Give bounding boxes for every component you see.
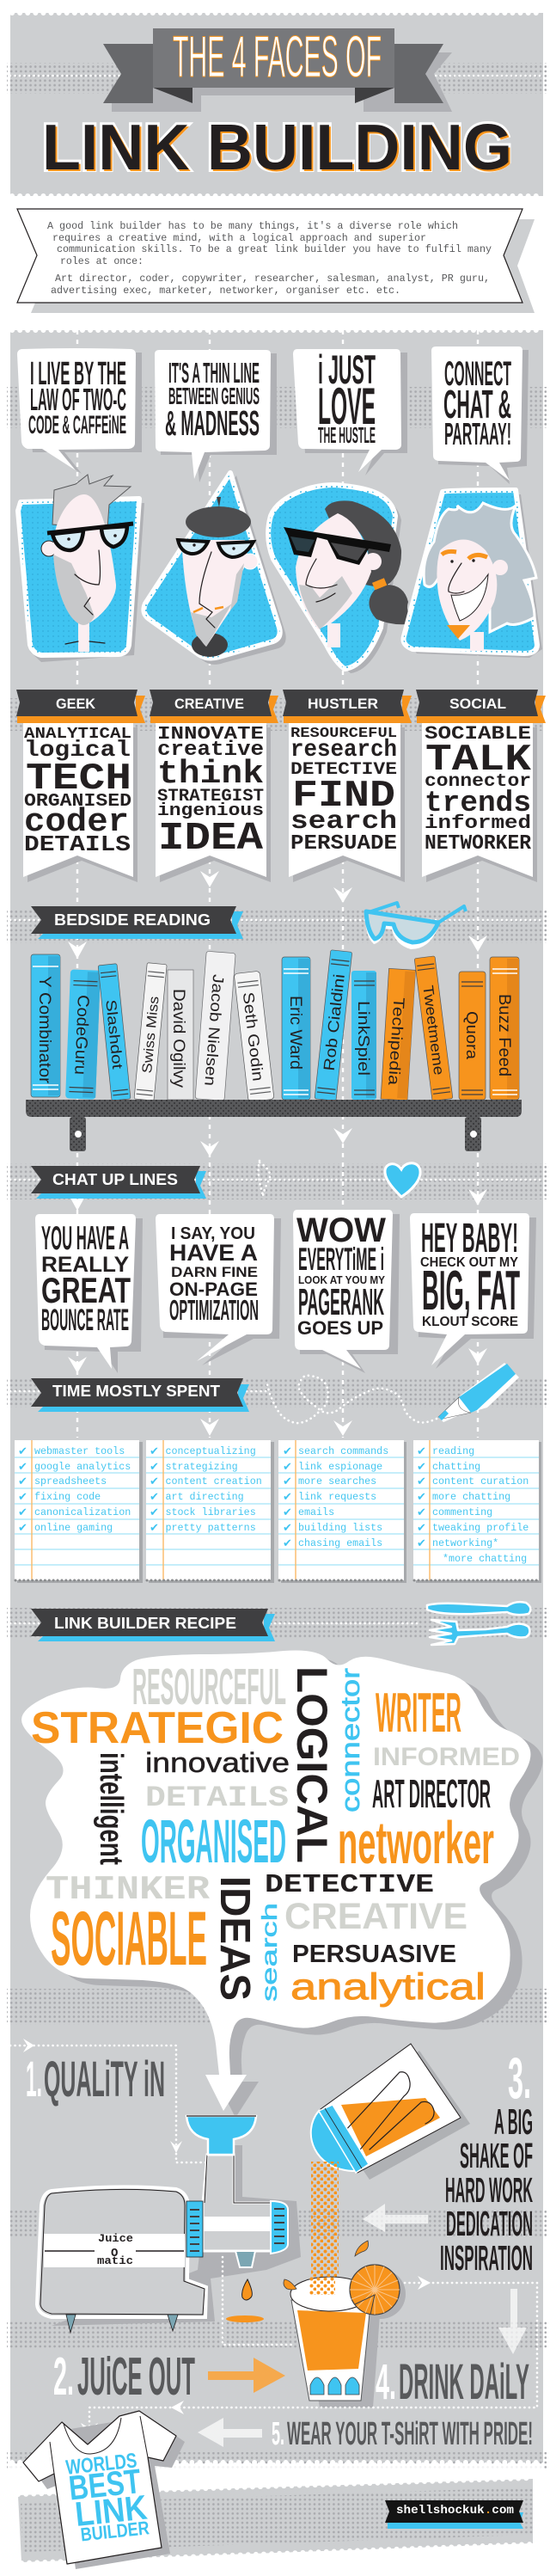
list: creative time: art directing <box>165 1491 244 1503</box>
chat bubble: pagerank <box>293 1210 400 1373</box>
chat bubble: klout score: CHECK OUT MY <box>420 1255 518 1270</box>
column: geek: coder <box>24 804 129 841</box>
word cloud: ORGANISED <box>141 1808 286 1876</box>
hair <box>424 503 536 632</box>
column: hustler: research <box>290 737 397 764</box>
list: hustler time: ✔ <box>283 1445 292 1458</box>
list: hustler time: ✔ <box>283 1506 292 1519</box>
column: social: informed <box>425 813 531 834</box>
word cloud: innovative <box>145 1747 290 1778</box>
chat bubble: on-page optimization: HAVE A <box>169 1240 258 1266</box>
book: Seth Godin: Seth Godin <box>240 991 266 1082</box>
list: hustler time: building lists <box>298 1522 382 1534</box>
end caps <box>186 2201 203 2257</box>
list: hustler time: ✔ <box>283 1522 292 1535</box>
column: hustler: RESOURCEFUL <box>290 726 397 742</box>
text: LAW OF TWO-C <box>30 382 126 417</box>
chat bubble: on-page optimization: OPTIMIZATION <box>169 1294 259 1326</box>
list: hustler time: link espionage <box>298 1461 382 1473</box>
list: creative time: ✔ <box>150 1475 159 1488</box>
list: social time: networking* <box>432 1537 498 1549</box>
speech bubble: hustler: THE HUSTLE <box>318 422 376 448</box>
heading: link building: LINK BUILDING <box>42 111 512 183</box>
column: creative: ingenious <box>157 801 264 821</box>
banner: bedside reading <box>31 906 243 939</box>
list: geek time: online gaming <box>34 1522 113 1534</box>
funnel <box>186 2116 256 2155</box>
column: geek: ANALYTICAL <box>24 726 131 743</box>
book: Techipedia: Techipedia <box>385 997 407 1087</box>
chat bubble: pagerank: EVERYTiME i <box>298 1242 384 1277</box>
website badge: shellshockuk.com <box>396 2504 514 2518</box>
book: Jacob Nielsen <box>195 951 235 1101</box>
list: hustler time: more searches <box>298 1475 376 1487</box>
orange slice <box>350 2265 400 2315</box>
heading: link building: LINK BUILDING <box>44 113 514 185</box>
chat bubble: on-page optimization <box>156 1214 281 1365</box>
banner: time mostly spent <box>31 1378 249 1412</box>
list: creative time: conceptualizing <box>165 1445 256 1457</box>
list: geek time: ✔ <box>18 1461 28 1474</box>
book: Jacob Nielsen: Jacob Nielsen <box>201 974 227 1087</box>
chat bubble: on-page optimization: ON-PAGE <box>169 1279 258 1300</box>
icon: blue glasses <box>365 903 466 949</box>
dotted guide under spout <box>223 2257 292 2345</box>
list: creative time: strategizing <box>165 1461 238 1473</box>
step 2 label: 2. <box>53 2347 74 2407</box>
glasses <box>47 524 133 550</box>
book: Y Combinator <box>31 954 60 1097</box>
list: social time: ✔ <box>417 1445 426 1458</box>
word cloud: DETECTIVE <box>265 1870 434 1900</box>
list: hustler time: search commands <box>298 1445 388 1457</box>
list: geek time <box>15 1440 143 1583</box>
intro text: roles at once: <box>60 255 144 267</box>
list: hustler time: ✔ <box>283 1537 292 1550</box>
list: geek time: ✔ <box>18 1522 28 1535</box>
juicer machine: Juice <box>98 2233 133 2245</box>
column: social <box>416 690 546 882</box>
panel: footer <box>18 2478 533 2563</box>
chat bubble: bounce rate: GREAT <box>41 1270 131 1310</box>
column: geek: DETAILS <box>24 831 131 857</box>
arrow: juice out to glass <box>208 2358 285 2393</box>
list: geek time: canonicalization <box>34 1506 131 1518</box>
word cloud: STRATEGIC <box>31 1703 284 1753</box>
book: Buzz Feed <box>490 957 519 1100</box>
book: LinkSpiel <box>351 971 376 1100</box>
t-shirt: WORLDS <box>64 2449 138 2480</box>
chat bubble: klout score: KLOUT SCORE <box>422 1315 518 1329</box>
text: CODE & CAFFEiNE <box>28 411 126 439</box>
column: hustler: search <box>290 807 397 837</box>
column: social: SOCIAL <box>449 696 506 712</box>
word cloud: SOCIABLE <box>51 1895 207 1981</box>
brackets <box>70 1117 481 1151</box>
list: social time: commenting <box>432 1506 492 1518</box>
icon: knife and fork <box>427 1602 530 1645</box>
bookshelf <box>26 950 522 1151</box>
banner: chat up lines <box>31 1166 206 1199</box>
banner: chat up lines: CHAT UP LINES <box>52 1171 178 1188</box>
arrow: left to t-shirt <box>198 2418 262 2447</box>
intro text <box>47 220 492 297</box>
juice glass <box>284 2241 406 2407</box>
website badge <box>385 2500 523 2529</box>
book: Swiss Miss: Swiss Miss <box>140 996 162 1074</box>
chat bubble: on-page optimization: I SAY, YOU <box>171 1224 255 1243</box>
list: geek time: ✔ <box>18 1445 28 1458</box>
list: creative time: ✔ <box>150 1506 159 1519</box>
banner: bedside reading: BEDSIDE READING <box>54 911 211 929</box>
arrow: left from step 3 <box>363 2204 428 2232</box>
list: social time <box>413 1440 541 1583</box>
list: hustler time: link requests <box>298 1491 376 1503</box>
book: Slashdot: Slashdot <box>102 999 125 1070</box>
chat bubble: bounce rate: REALLY <box>41 1253 129 1277</box>
book: Swiss Miss <box>134 963 167 1101</box>
book: Tweetmeme: Tweetmeme <box>419 984 447 1076</box>
intro text: advertising exec, marketer, networker, organiser etc. etc. <box>51 285 400 297</box>
book: David Ogilvy: David Ogilvy <box>169 989 187 1089</box>
list: creative time: ✔ <box>150 1491 159 1504</box>
speech bubble: geek <box>17 348 142 474</box>
speech bubble: hustler: LOVE <box>318 377 376 435</box>
title ribbon <box>103 24 452 112</box>
column: hustler <box>283 690 412 882</box>
doodle: dotted scribble from pen <box>267 1376 437 1423</box>
list: social time: more chatting <box>432 1491 510 1503</box>
chat bubble: pagerank: WOW <box>296 1211 386 1249</box>
list: creative time: ✔ <box>150 1461 159 1474</box>
list: hustler time: ✔ <box>283 1475 292 1488</box>
face: geek <box>18 475 144 662</box>
shelf <box>26 1100 522 1117</box>
column: geek: ORGANISED <box>24 792 131 812</box>
intro text: communication skills. To be a great link builder you have to fulfil many <box>57 243 492 255</box>
text: PAGERANK <box>298 1281 384 1323</box>
glasses <box>178 540 254 557</box>
list: social time: reading <box>432 1445 474 1457</box>
book: Eric Ward: Eric Ward <box>286 996 304 1070</box>
column: geek: logical <box>24 737 131 763</box>
panel: bottom band <box>7 2452 547 2483</box>
speech bubble: hustler <box>293 347 407 475</box>
list: geek time: fixing code <box>34 1491 101 1503</box>
list: geek time: google analytics <box>34 1461 131 1473</box>
book: CodeGuru: CodeGuru <box>70 995 92 1075</box>
column: hustler: DETECTIVE <box>290 760 397 780</box>
speech bubble: creative <box>155 350 277 482</box>
word cloud: analytical <box>290 1966 486 2008</box>
list: creative time: pretty patterns <box>165 1522 256 1534</box>
list: social time: *more chatting <box>443 1553 527 1565</box>
column: hustler: PERSUADE <box>290 832 397 856</box>
text: IT'S A THIN LINE <box>168 357 260 389</box>
list: hustler time: emails <box>298 1506 334 1518</box>
book: Seth Godin <box>234 971 274 1102</box>
t-shirt: LINK <box>73 2488 149 2534</box>
hair <box>52 475 131 529</box>
icon: juice drop and puddle <box>226 2279 264 2322</box>
banner: time mostly spent: TIME MOSTLY SPENT <box>52 1383 220 1400</box>
list: geek time: ✔ <box>18 1475 28 1488</box>
book: Slashdot <box>98 964 131 1101</box>
list: geek time: ✔ <box>18 1506 28 1519</box>
juicer machine: O <box>111 2247 118 2260</box>
chat bubble: pagerank: LOOK AT YOU MY <box>298 1273 385 1286</box>
list: social time: ✔ <box>417 1537 426 1550</box>
chat bubble: pagerank: GOES UP <box>297 1317 383 1339</box>
intro text: A good link builder has to be many things, it's a diverse role which <box>47 220 458 232</box>
column: creative: STRATEGIST <box>157 787 264 807</box>
chat bubble: on-page optimization: DARN FINE <box>171 1264 258 1280</box>
list: geek time: webmaster tools <box>34 1445 125 1457</box>
machine shadow <box>52 2145 301 2326</box>
column: creative: CREATIVE <box>174 696 244 712</box>
speech bubble: social <box>431 347 529 484</box>
list: hustler time: chasing emails <box>298 1537 382 1549</box>
arrow: down to drink daily <box>498 2289 527 2354</box>
list: creative time <box>146 1440 274 1583</box>
book: David Ogilvy <box>168 970 193 1100</box>
column: creative: INNOVATE <box>157 725 264 745</box>
column: social: trends <box>425 788 531 820</box>
column: creative: IDEA <box>158 817 263 861</box>
intro text: Art director, coder, copywriter, researcher, salesman, analyst, PR guru, <box>55 273 490 285</box>
word cloud: THINKER <box>46 1871 211 1909</box>
word cloud: RESOURCEFUL <box>132 1659 286 1715</box>
text: BOUNCE RATE <box>41 1303 129 1337</box>
list: social time: ✔ <box>417 1461 426 1474</box>
face: social <box>403 490 542 658</box>
sunglasses <box>284 527 391 565</box>
word cloud: search <box>258 1903 282 2002</box>
doodle: loop near heart <box>259 1161 270 1195</box>
hair and ponytail <box>325 500 401 588</box>
step 5 label: 5. <box>272 2416 284 2452</box>
list: social time: ✔ <box>417 1491 426 1504</box>
banner: link builder recipe: LINK BUILDER RECIPE <box>54 1615 236 1632</box>
book: Eric Ward <box>282 957 310 1100</box>
intro text: requires a creative mind, with a logical approach and superior <box>52 232 426 244</box>
juice stream dots <box>311 2162 339 2294</box>
book: Rob Cialdini: Rob Cialdini <box>321 973 348 1071</box>
chat bubble: klout score <box>410 1213 536 1369</box>
text: YOU HAVE A <box>41 1220 129 1257</box>
list: creative time: ✔ <box>150 1522 159 1535</box>
word cloud: IDEAS <box>211 1876 258 2001</box>
speech bubble: hustler: i JUST <box>318 347 376 392</box>
list: hustler time: ✔ <box>283 1491 292 1504</box>
list: social time: ✔ <box>417 1475 426 1488</box>
word cloud: INFORMED <box>373 1743 520 1771</box>
panel: header background <box>7 13 547 196</box>
arrowheads along dashed guides <box>68 871 487 1436</box>
list: hustler time <box>278 1440 406 1583</box>
column: geek: GEEK <box>56 696 96 712</box>
list: creative time: content creation <box>165 1475 262 1487</box>
heading: link building: LINK BUILDING <box>42 111 512 183</box>
icon: pen <box>438 1363 519 1422</box>
column: social: NETWORKER <box>425 832 532 856</box>
splash drops <box>284 2279 296 2290</box>
list: hustler time: ✔ <box>283 1461 292 1474</box>
beret <box>186 506 251 537</box>
book: CodeGuru <box>65 969 101 1100</box>
book: Rob Cialdini <box>315 950 352 1101</box>
pipe and barrel <box>203 2155 272 2251</box>
juicer machine <box>37 2116 301 2333</box>
text: BETWEEN GENIUS <box>168 383 260 409</box>
dotted guide to t-shirt <box>81 2276 537 2439</box>
column: creative <box>150 690 278 882</box>
list: social time: tweaking profile <box>432 1522 529 1534</box>
speech bubble: geek: I LIVE BY THE <box>30 356 126 392</box>
step 1 label: 1. <box>26 2052 42 2107</box>
column: social: SOCIABLE <box>425 723 531 745</box>
list: creative time: ✔ <box>150 1445 159 1458</box>
book: LinkSpiel: LinkSpiel <box>355 1001 372 1076</box>
chat bubble: bounce rate <box>35 1214 143 1373</box>
banner: link builder recipe <box>31 1609 275 1641</box>
t-shirt: BEST <box>67 2463 143 2508</box>
t-shirt: BUILDER <box>80 2517 150 2546</box>
word cloud: intelligent <box>93 1752 129 1865</box>
t-shirt <box>23 2411 185 2569</box>
column: creative: creative <box>157 739 264 762</box>
list: social time: content curation <box>432 1475 529 1487</box>
face: creative <box>144 473 286 665</box>
list: geek time: ✔ <box>18 1491 28 1504</box>
book: Techipedia <box>381 968 416 1101</box>
list: social time: ✔ <box>417 1522 426 1535</box>
list: creative time: stock libraries <box>165 1506 256 1518</box>
column: geek <box>16 690 145 882</box>
column: creative: think <box>157 756 264 793</box>
text: JUiCE OUT <box>77 2347 195 2407</box>
column: hustler: FIND <box>292 775 395 818</box>
book: Tweetmeme <box>414 956 453 1101</box>
feet <box>66 2315 76 2333</box>
word cloud <box>21 1650 542 2118</box>
word cloud: DETAILS <box>145 1782 289 1815</box>
icon: heart <box>385 1163 420 1197</box>
word cloud: PERSUASIVE <box>292 1941 456 1968</box>
book: Y Combinator: Y Combinator <box>35 976 53 1084</box>
step 3 shaker <box>311 2044 470 2180</box>
motor body <box>37 2187 206 2317</box>
column: social: connector <box>425 772 531 792</box>
list: geek time: spreadsheets <box>34 1475 107 1487</box>
intro ribbon <box>17 209 535 313</box>
step 4 label: 4. <box>376 2354 396 2410</box>
column: social: TALK <box>425 739 532 782</box>
word cloud: LOGICAL <box>288 1666 336 1863</box>
list: social time: ✔ <box>417 1506 426 1519</box>
word cloud: CREATIVE <box>284 1896 468 1937</box>
book: Buzz Feed: Buzz Feed <box>495 994 513 1076</box>
book: Quora <box>459 972 486 1100</box>
face: hustler <box>268 485 419 673</box>
column: geek: TECH <box>26 757 131 800</box>
step 1 label: QUALiTY iN <box>44 2052 165 2107</box>
speech bubble: creative: & MADNESS <box>165 403 260 443</box>
book: Quora: Quora <box>463 1011 480 1060</box>
list: social time: chatting <box>432 1461 480 1473</box>
step 2 label <box>53 2347 195 2407</box>
word cloud: connector <box>335 1668 365 1812</box>
juicer machine: matic <box>97 2255 133 2267</box>
step 1 label <box>10 2039 206 2162</box>
step 3 text <box>440 2045 533 2278</box>
column: hustler: HUSTLER <box>308 696 378 712</box>
